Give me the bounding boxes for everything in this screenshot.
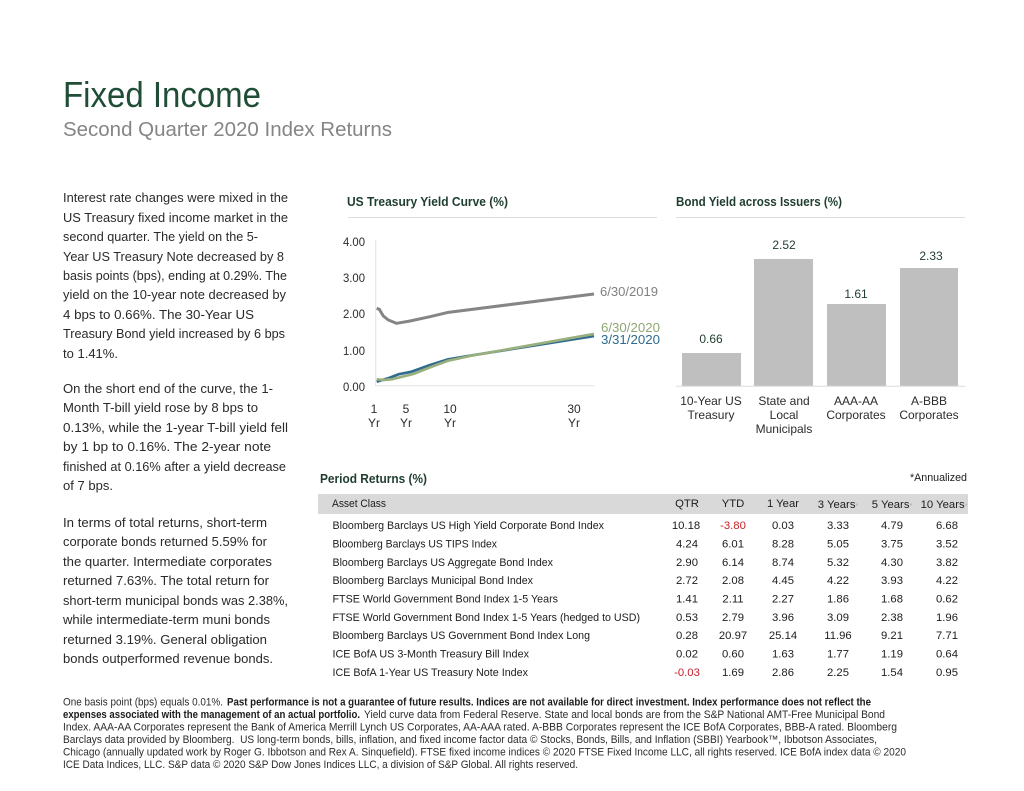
table values: 6.01 — [722, 538, 744, 550]
table row labels: Bloomberg Barclays US TIPS Index — [332, 538, 497, 550]
bar category labels: 10-Year US — [680, 394, 742, 408]
table values — [672, 520, 958, 679]
commentary text column: to 1.41%. — [63, 346, 118, 361]
heading: period returns: Period Returns (%) — [320, 471, 427, 486]
footnote disclosures: expenses associated with the management of an actual portfolio. — [63, 709, 360, 721]
table values: 1.68 — [881, 594, 903, 606]
bar category labels: State and — [758, 394, 810, 408]
y axis labels: 1.00 — [343, 344, 365, 358]
table values: 1.63 — [772, 648, 794, 660]
y axis labels: 3.00 — [343, 271, 365, 285]
x axis labels: 1 — [371, 402, 378, 416]
commentary text column: yield on the 10-year note decreased by — [63, 287, 286, 302]
table values: 0.02 — [676, 648, 698, 660]
series label: 6/30/2020: 6/30/2020 — [601, 320, 660, 335]
bars — [682, 259, 958, 386]
table values: 10.18 — [672, 520, 700, 532]
commentary text column: the quarter. Intermediate corporates — [63, 554, 272, 569]
bar category labels: Municipals — [756, 422, 812, 436]
bar category labels: Treasury — [688, 408, 734, 422]
bar category labels: AAA-AA — [834, 394, 878, 408]
table values: 5.05 — [827, 538, 849, 550]
panel: bond yield across issuers — [676, 194, 965, 436]
table row labels: ICE BofA 1-Year US Treasury Note Index — [332, 667, 528, 679]
table values: 1.19 — [881, 648, 903, 660]
x axis labels: Yr — [568, 416, 580, 430]
footnote disclosures: Index. AAA-AA Corporates represent the Bank of America Merrill Lynch US Corporates, AA-AAA rated. A-BBB Corporates represent the ICE BofA Corporates, BBB-A rated. Bloomberg — [63, 722, 897, 734]
bar value labels: 2.52 — [772, 238, 796, 252]
table header row: Asset Class — [332, 498, 386, 510]
table values: 0.28 — [676, 630, 698, 642]
table values: 2.72 — [676, 575, 698, 587]
commentary text column: corporate bonds returned 5.59% for — [63, 534, 268, 549]
table values: 9.21 — [881, 630, 903, 642]
table values: -0.03 — [674, 667, 700, 679]
panel: US Treasury yield curve — [343, 194, 660, 430]
table values: 8.74 — [772, 557, 794, 569]
bar value labels: 2.33 — [919, 249, 943, 263]
table values: 0.60 — [722, 648, 744, 660]
bar category labels: Corporates — [899, 408, 959, 422]
table values: 3.33 — [827, 520, 849, 532]
table values: 5.32 — [827, 557, 849, 569]
table values: 4.24 — [676, 538, 698, 550]
bar category labels: A-BBB — [911, 394, 947, 408]
table values: 4.45 — [772, 575, 794, 587]
commentary text column: bonds outperformed revenue bonds. — [63, 651, 273, 666]
table values: 2.38 — [881, 612, 903, 624]
table values: -3.80 — [720, 520, 746, 532]
commentary text column: 4 bps to 0.66%. The 30-Year US — [63, 307, 254, 322]
commentary text column: of 7 bps. — [63, 478, 113, 493]
commentary text column: by 1 bp to 0.16%. The 2-year note — [63, 439, 271, 454]
table header row: 3 Years* — [818, 499, 858, 511]
table values: 4.22 — [827, 575, 849, 587]
table values: 2.11 — [722, 594, 744, 606]
table values: 2.79 — [722, 612, 744, 624]
table values: 1.41 — [676, 594, 698, 606]
y axis labels — [343, 235, 365, 394]
footnote disclosures: Yield curve data from Federal Reserve. State and local bonds are from the S&P National AMT-Free Municipal Bond — [364, 709, 885, 721]
commentary text column: Treasury Bond yield increased by 6 bps — [63, 326, 285, 341]
table values: 0.53 — [676, 612, 698, 624]
footnote disclosures — [63, 696, 906, 771]
commentary text column: On the short end of the curve, the 1- — [63, 381, 273, 396]
table row labels: Bloomberg Barclays US Aggregate Bond Index — [332, 557, 553, 569]
table values: 1.77 — [827, 648, 849, 660]
bar category labels — [680, 394, 959, 436]
x axis labels: Yr — [368, 416, 380, 430]
footnote disclosures: ICE Data Indices, LLC. S&P data © 2020 S&P Dow Jones Indices LLC, a division of S&P Global. All rights reserved. — [63, 759, 578, 771]
table values: 11.96 — [824, 630, 852, 642]
table values: 2.25 — [827, 667, 849, 679]
commentary text column: Month T-bill yield rose by 8 bps to — [63, 400, 258, 415]
y axis labels: 0.00 — [343, 380, 365, 394]
line: 6/30/2019 — [377, 294, 594, 323]
table row labels — [332, 520, 640, 679]
series label: 6/30/2019: 6/30/2019 — [600, 284, 658, 299]
commentary text column: second quarter. The yield on the 5- — [63, 229, 258, 244]
table values: 7.71 — [936, 630, 958, 642]
x axis labels: Yr — [444, 416, 456, 430]
x axis labels: 5 — [403, 402, 410, 416]
table values: 4.22 — [936, 575, 958, 587]
table values: 3.75 — [881, 538, 903, 550]
bar category labels: Local — [770, 408, 798, 422]
commentary text column: short-term municipal bonds was 2.38%, — [63, 593, 288, 608]
x axis labels — [368, 402, 581, 430]
table values: 8.28 — [772, 538, 794, 550]
footnote disclosures: Barclays data provided by Bloomberg. US long-term bonds, bills, inflation, and fixed income factor data © Stocks, Bonds, Bills, and Inflation (SBBI) Yearbook™, Ibbotson Associates, — [63, 734, 877, 746]
table header row: YTD — [722, 498, 744, 510]
y axis labels: 2.00 — [343, 307, 365, 321]
table values: 3.93 — [881, 575, 903, 587]
commentary text column: returned 3.19%. General obligation — [63, 632, 267, 647]
table values: 1.96 — [936, 612, 958, 624]
subtitle: Second Quarter 2020 Index Returns — [63, 118, 392, 141]
table values: 25.14 — [769, 630, 797, 642]
footnote disclosures: Past performance is not a guarantee of future results. Indices are not available for direct investment. Index performance does not reflect the — [227, 696, 871, 708]
series label: 3/31/2020: 3/31/2020 — [601, 332, 660, 347]
table header row: 10 Years* — [921, 499, 968, 511]
table values: 0.62 — [936, 594, 958, 606]
table values: 1.86 — [827, 594, 849, 606]
bar category labels: Corporates — [826, 408, 886, 422]
line chart axes — [376, 240, 594, 386]
commentary text column: while intermediate-term muni bonds — [62, 612, 270, 627]
heading: yield curve: US Treasury Yield Curve (%) — [347, 194, 508, 209]
commentary text column: returned 7.63%. The total return for — [63, 573, 270, 588]
table values: 3.82 — [936, 557, 958, 569]
bar value labels — [699, 238, 943, 346]
x axis labels: 10 — [443, 402, 457, 416]
table values: 3.96 — [772, 612, 794, 624]
panel: period returns table — [318, 471, 968, 679]
commentary text column: US Treasury fixed income market in the — [63, 210, 288, 225]
table header row: 5 Years* — [872, 499, 912, 511]
line: 6/30/2020 — [377, 334, 594, 380]
table row labels: FTSE World Government Bond Index 1-5 Years — [332, 594, 558, 606]
commentary text column: finished at 0.16% after a yield decrease — [63, 459, 286, 474]
table row labels: Bloomberg Barclays US Government Bond Index Long — [332, 630, 590, 642]
table row labels: FTSE World Government Bond Index 1-5 Years (hedged to USD) — [332, 612, 640, 624]
table values: 2.27 — [772, 594, 794, 606]
table values: 0.95 — [936, 667, 958, 679]
table values: 2.90 — [676, 557, 698, 569]
table values: 1.54 — [881, 667, 903, 679]
title: Fixed Income — [63, 74, 261, 115]
table header row: 1 Year — [767, 498, 799, 510]
table values: 0.64 — [936, 648, 958, 660]
table values: 0.03 — [772, 520, 794, 532]
table header row: QTR — [675, 498, 699, 510]
commentary text column: Interest rate changes were mixed in the — [63, 190, 288, 205]
commentary text column: In terms of total returns, short-term — [63, 515, 267, 530]
commentary text column — [62, 190, 288, 666]
x axis labels: Yr — [400, 416, 412, 430]
table values: 3.09 — [827, 612, 849, 624]
table values: 3.52 — [936, 538, 958, 550]
line: 3/31/2020 — [377, 336, 594, 382]
commentary text column: Year US Treasury Note decreased by 8 — [63, 249, 284, 264]
heading: bond yield: Bond Yield across Issuers (%) — [676, 194, 842, 209]
y axis labels: 4.00 — [343, 235, 365, 249]
bar value labels: 1.61 — [844, 287, 868, 301]
footnote disclosures: Chicago (annually updated work by Roger G. Ibbotson and Rex A. Sinquefield). FTSE fixed income indices © 2020 FTSE Fixed Income LLC, all rights reserved. ICE BofA index data © 2020 — [63, 746, 906, 758]
commentary text column: 0.13%, while the 1-year T-bill yield fell — [63, 420, 288, 435]
table values: 4.79 — [881, 520, 903, 532]
table header row — [318, 494, 968, 514]
table values: 4.30 — [881, 557, 903, 569]
table values: 2.86 — [772, 667, 794, 679]
annualized note: *Annualized — [910, 472, 967, 484]
table values: 2.08 — [722, 575, 744, 587]
table values: 6.14 — [722, 557, 744, 569]
footnote disclosures: One basis point (bps) equals 0.01%. — [63, 696, 223, 708]
table row labels: Bloomberg Barclays Municipal Bond Index — [332, 575, 533, 587]
table row labels: ICE BofA US 3-Month Treasury Bill Index — [332, 648, 529, 660]
table row labels: Bloomberg Barclays US High Yield Corporate Bond Index — [332, 520, 604, 532]
x axis labels: 30 — [567, 402, 581, 416]
bar value labels: 0.66 — [699, 332, 723, 346]
table values: 1.69 — [722, 667, 744, 679]
commentary text column: basis points (bps), ending at 0.29%. The — [63, 268, 287, 283]
table values: 20.97 — [719, 630, 747, 642]
table values: 6.68 — [936, 520, 958, 532]
